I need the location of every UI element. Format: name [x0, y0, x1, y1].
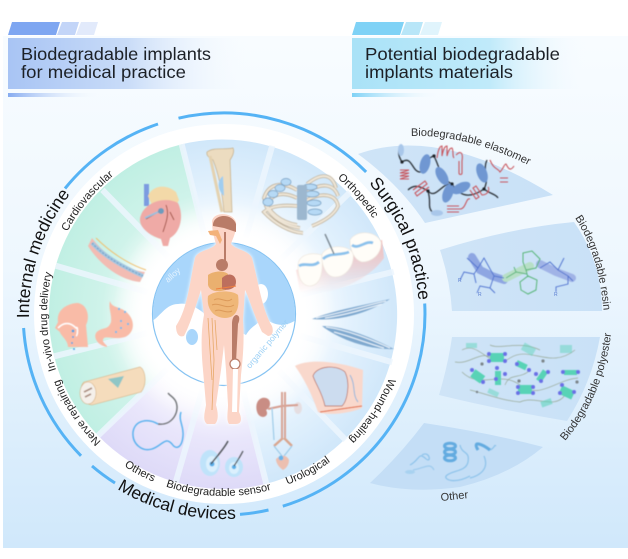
label: orthopedic: Orthopedic [339, 174, 377, 218]
label: in-vivo drug delivery: In-vivo drug delivery [39, 272, 56, 372]
sectors: medical devices [98, 314, 266, 489]
category heading: internal medicine: Internal medicine [16, 190, 68, 317]
protein structure [405, 443, 496, 481]
header bar [352, 38, 628, 89]
icon: leg bones with implant [207, 148, 234, 212]
panel: biodegradable resin: R [554, 292, 558, 298]
sector wheel [49, 139, 397, 489]
icon: urinary tract [256, 392, 302, 470]
header: potential biodegradable implants materials [352, 22, 628, 97]
label: wound-healing: Wound-healing [348, 380, 396, 443]
icon: biodegradable sensors [200, 441, 243, 477]
panel: biodegradable elastomer [358, 144, 553, 223]
icon: nerve segment [80, 367, 145, 405]
panel: biodegradable resin: R [458, 278, 462, 284]
icon: suture wires [312, 299, 394, 349]
ring outline [152, 242, 296, 386]
panel: biodegradable polyester [439, 337, 600, 421]
label: nerve repairing: Nerve repairing [54, 380, 100, 446]
ring labels [39, 171, 396, 496]
panel: biodegradable resin: R [478, 292, 482, 298]
label: cardiovascular: Cardiovascular [62, 171, 112, 230]
label: urological: Urological [285, 456, 330, 484]
header bar [8, 38, 308, 89]
label: alloy: alloy [163, 265, 183, 284]
header: biodegradable implants for medical practice [8, 22, 308, 97]
sector illustrations [55, 148, 394, 477]
alloy and polymer regions [150, 240, 296, 345]
category heading: medical devices: Medical devices [118, 479, 236, 520]
header tabs [8, 22, 98, 35]
header title: Potential biodegradable [365, 44, 560, 64]
icon: suture thread [133, 393, 183, 450]
header title: implants materials [365, 62, 513, 82]
icon: ribcage with plates [263, 176, 338, 233]
panel: other material [370, 423, 543, 490]
polyester network [455, 343, 580, 408]
label: biodegradable polyester: Biodegradable polyester [560, 332, 611, 440]
icon: wound tissue [295, 362, 363, 414]
label: others: Others [126, 461, 155, 481]
label: biodegradable elastomer: Biodegradable elastomer [412, 128, 531, 164]
icon: heart with implant [140, 184, 181, 246]
header strip [8, 93, 100, 97]
body silhouette [176, 214, 273, 424]
panel: biodegradable resin [440, 222, 602, 311]
header title: Biodegradable implants [21, 44, 211, 64]
white label ring [34, 124, 414, 504]
icon: oral drug delivery [55, 301, 133, 350]
sectors: surgical practice [182, 139, 397, 484]
icon: teeth with filling [296, 233, 384, 293]
header title: for meidical practice [21, 62, 186, 82]
category heading: surgical practice: Surgical practice [370, 178, 429, 300]
label: biodegradable resin: Biodegradable resin [576, 214, 611, 310]
label: biodegradable sensor: Biodegradable sensor [166, 480, 270, 496]
label: other: Other [440, 489, 469, 504]
icon: vascular stent [88, 238, 146, 282]
central human figure circle [150, 240, 296, 386]
resin molecule [460, 251, 573, 294]
elastomer network [398, 144, 514, 216]
header tabs [352, 22, 442, 35]
sectors: internal medicine [49, 144, 224, 436]
blue category arcs [24, 113, 425, 514]
body organs [208, 216, 240, 412]
panel: material sectors [358, 128, 611, 504]
label: organic polymer: organic polymer [244, 317, 291, 370]
header strip [352, 93, 440, 97]
human body [176, 214, 273, 424]
